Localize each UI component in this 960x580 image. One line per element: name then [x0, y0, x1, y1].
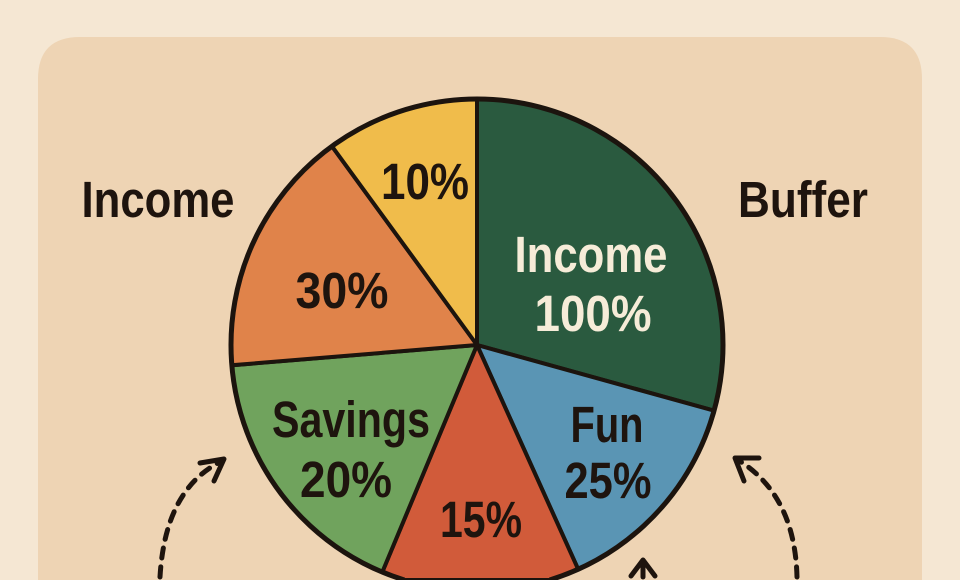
label: Income: Income: [82, 171, 234, 228]
text: Savings 20%: [272, 391, 430, 508]
text: 30%: 30%: [296, 262, 388, 319]
arrow: left dashed: [160, 459, 224, 577]
slice: income 100%: [479, 102, 720, 408]
text: Income 100%: 100%: [534, 285, 652, 342]
text: 10%: 10%: [381, 153, 469, 210]
text: 15%: 15%: [440, 491, 522, 548]
text: Fun 25%: 25%: [564, 452, 652, 509]
text: Fun 25%: [564, 396, 652, 509]
text: Savings 20%: Savings: [272, 391, 430, 448]
text: Savings 20%: 20%: [300, 451, 392, 508]
text: Fun 25%: Fun: [570, 396, 644, 453]
slice: savings 20%: [234, 347, 477, 570]
text: Income 100%: Income: [514, 226, 668, 283]
arrow: bottom up: [631, 560, 655, 577]
slice: fun 25%: [479, 344, 712, 566]
slice: 10%: [332, 102, 475, 344]
slice: 30%: [234, 150, 474, 368]
pie chart: [228, 96, 726, 580]
text: Income 100%: [514, 226, 668, 342]
label: Buffer: Buffer: [738, 171, 868, 228]
slice: 15%: [379, 345, 583, 580]
arrow: right dashed: [735, 458, 797, 577]
